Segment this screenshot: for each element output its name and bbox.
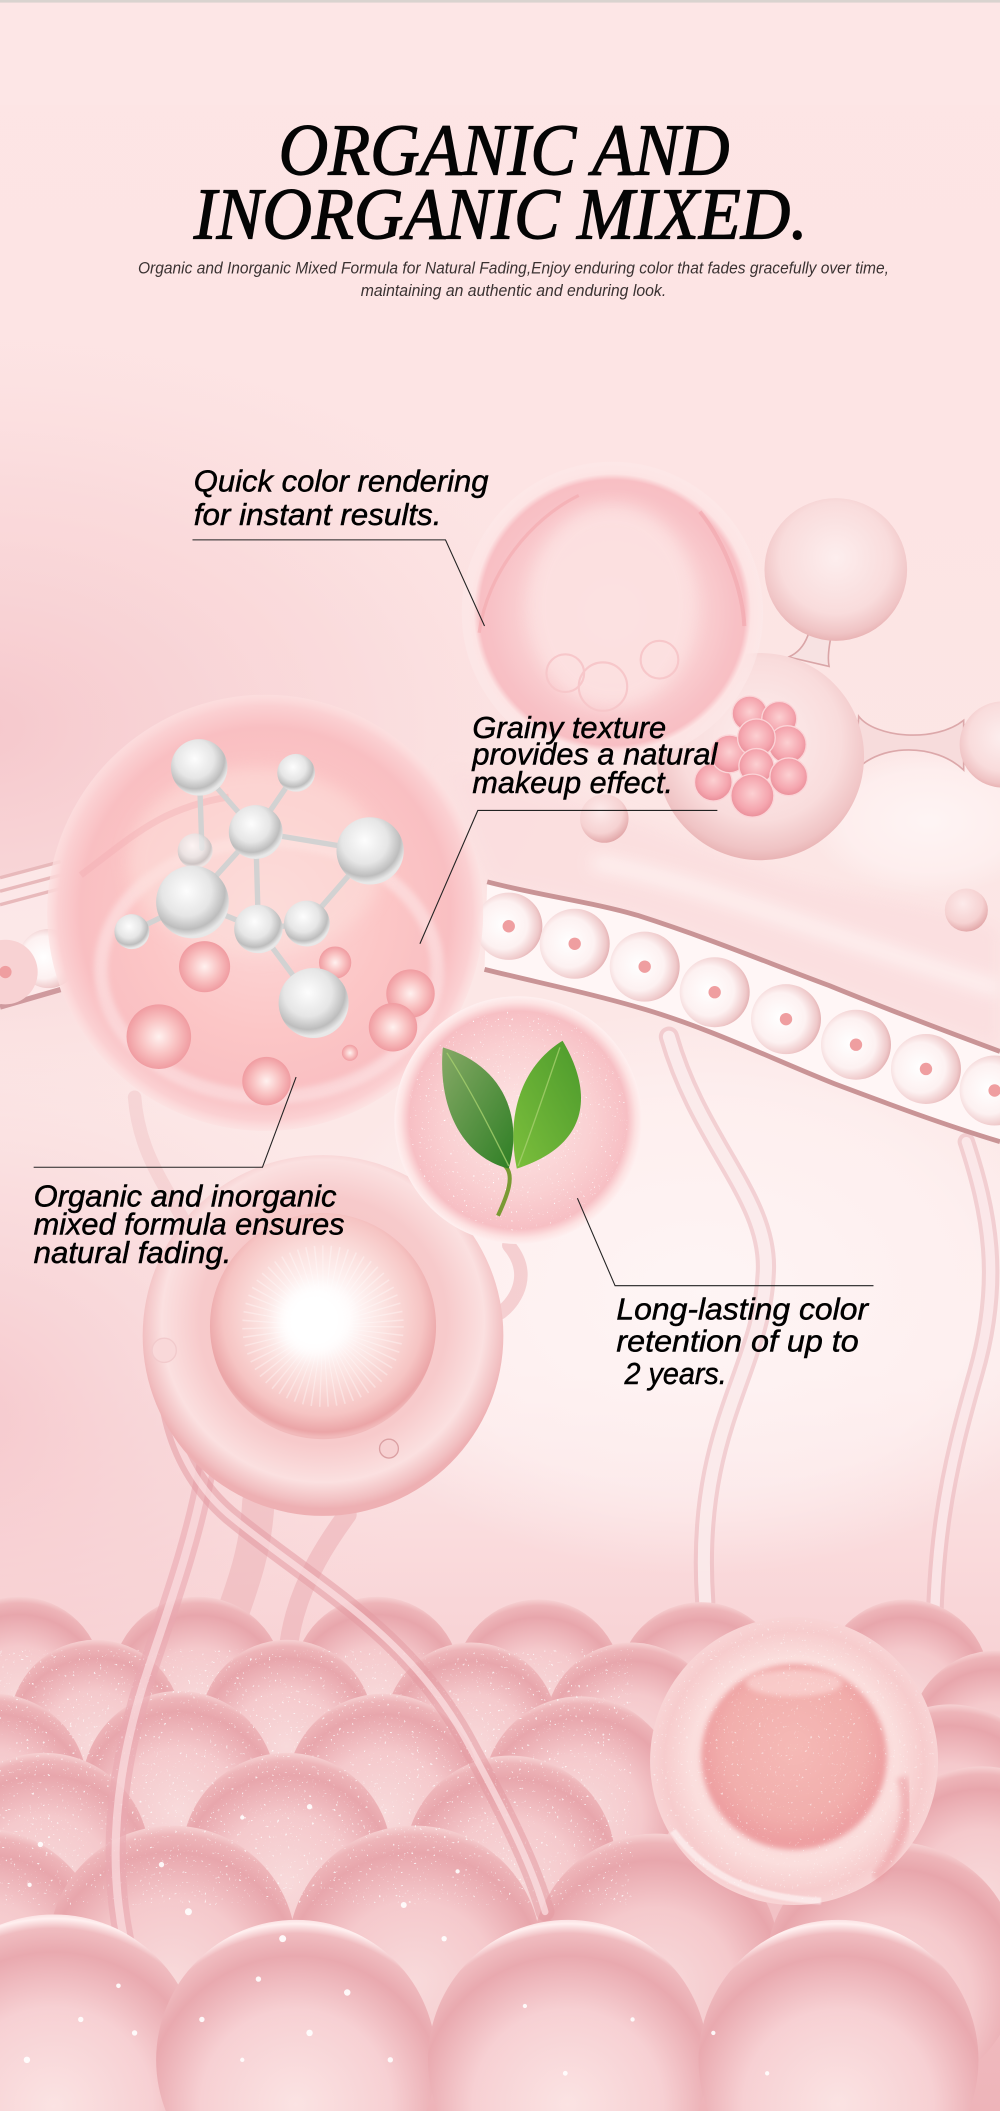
bottom right bubble <box>650 1617 938 1905</box>
title: ORGANIC AND <box>279 109 729 190</box>
callout: long lasting: 2 years. <box>624 1358 727 1391</box>
callout: organic and inorganic: mixed formula ensures <box>34 1209 345 1242</box>
back row of spheres <box>0 1597 989 1769</box>
callout: long lasting: Long-lasting color <box>616 1293 870 1326</box>
subtitle: maintaining an authentic and enduring look. <box>361 281 666 300</box>
callout: long lasting: retention of up to <box>616 1326 859 1359</box>
pearls <box>127 941 435 1105</box>
tube interior <box>485 882 1000 1142</box>
swirl bubble <box>462 462 763 763</box>
strands: liquid tubes behind the spheres <box>135 1037 991 1750</box>
front row of spheres <box>0 1914 978 2111</box>
leaves <box>442 1041 581 1216</box>
callout: quick color rendering <box>192 465 489 626</box>
silver molecule <box>114 739 404 1038</box>
callout: long lasting <box>577 1198 873 1391</box>
callout: grainy texture: makeup effect. <box>472 767 673 800</box>
cell bubble <box>143 1155 503 1516</box>
tube connector to small bubble <box>789 606 837 666</box>
callout: organic and inorganic: Organic and inorganic <box>34 1180 336 1213</box>
left ribbon piece <box>0 862 78 1007</box>
fine sparkle texture <box>0 1649 633 1905</box>
strands crossing the spheres <box>116 1292 545 1939</box>
callout: organic and inorganic: natural fading. <box>34 1237 231 1270</box>
callout: grainy texture: Grainy texture <box>472 712 666 745</box>
upper sheen ribbon <box>444 767 1000 1050</box>
title: INORGANIC MIXED. <box>193 173 808 254</box>
callout: grainy texture: provides a natural <box>471 739 719 772</box>
callout: quick color rendering: for instant results. <box>194 499 441 532</box>
callout: grainy texture <box>420 712 719 944</box>
pink bead cluster <box>694 696 808 817</box>
molecule bubble <box>47 695 483 1131</box>
floating droplets <box>580 794 988 932</box>
subtitle: Organic and Inorganic Mixed Formula for Natural Fading,Enjoy enduring color that fades gracefully over time, <box>138 258 889 277</box>
fifth row of spheres <box>0 1826 1000 2095</box>
inner reflective ring <box>101 841 437 1097</box>
callout: organic and inorganic <box>34 1077 345 1270</box>
ribbon: bead tube <box>0 767 1000 1142</box>
title <box>193 109 808 254</box>
second row of spheres <box>9 1640 1000 1823</box>
right edge bubble <box>960 701 1000 788</box>
small clear bubble <box>764 498 907 641</box>
third row of spheres <box>0 1691 1000 1904</box>
speckles <box>408 1010 629 1231</box>
sparkles on the spheres <box>24 1804 769 2076</box>
leaf bubble <box>394 996 642 1244</box>
fourth row of spheres <box>0 1753 1000 1976</box>
connected bubble chain: upper right <box>657 498 1000 860</box>
subtitle <box>138 258 889 300</box>
bead bubble <box>657 653 864 860</box>
bead row <box>475 893 1000 1126</box>
white fluff <box>283 1286 363 1366</box>
callout: quick color rendering: Quick color rendering <box>194 465 489 498</box>
tube connector to right-edge bubble <box>856 716 964 770</box>
